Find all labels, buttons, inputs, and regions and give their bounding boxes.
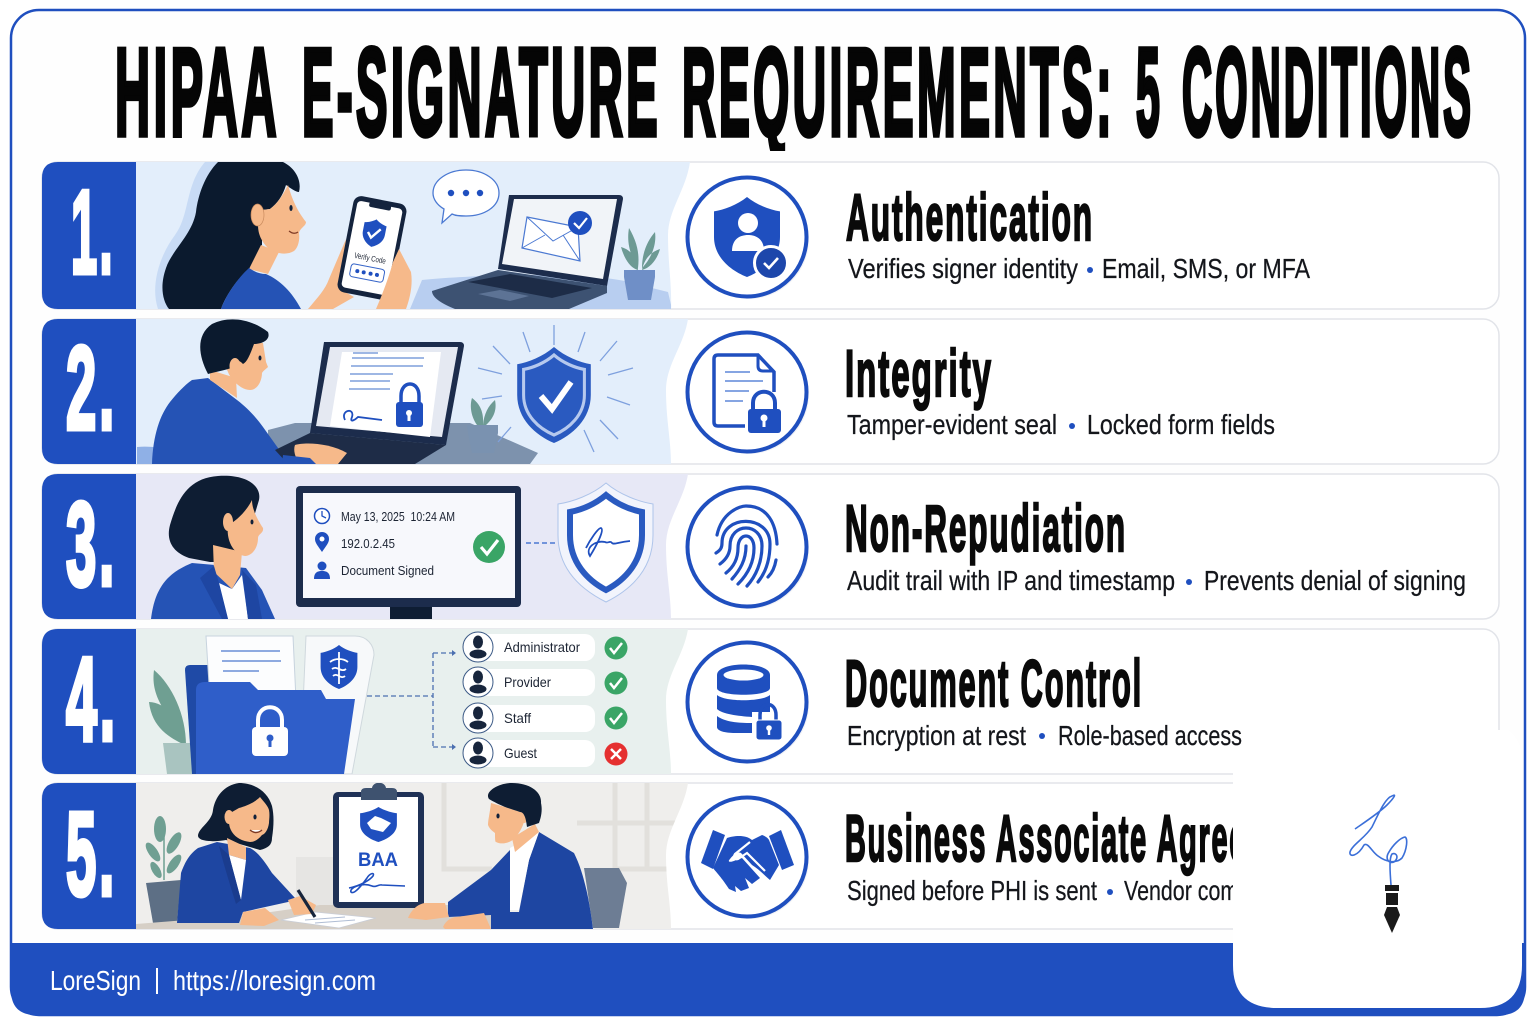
- illustration: locked folder with role access list: Provider: [504, 674, 551, 690]
- number 2: 2.: [66, 322, 117, 455]
- text: document control details: [847, 720, 1242, 751]
- footer bar: LoreSign: [50, 965, 141, 996]
- number 2: [42, 319, 136, 464]
- illustration: signing the BAA at a desk: [136, 783, 696, 929]
- number 1: 1.: [71, 166, 115, 299]
- text: business associate agreement details: Signed before PHI is sent: [847, 875, 1097, 906]
- panel: condition 4 document control: [42, 629, 1499, 774]
- number 1: [42, 162, 136, 309]
- illustration: locked folder with role access list: Staff: [504, 710, 531, 726]
- panel: condition 2 integrity: Integrity: [845, 336, 993, 410]
- panel: condition 1 authentication: Authentication: [846, 180, 1094, 254]
- panel: condition 3 non-repudiation: [42, 474, 1499, 621]
- panel: condition 3 non-repudiation: Non-Repudiation: [845, 491, 1127, 565]
- number 5: 5.: [66, 788, 117, 921]
- illustration: woman with audit log monitor and signed shield: May 13, 2025 10:24 AM: [341, 509, 455, 524]
- illustration: woman with audit log monitor and signed shield: [136, 474, 696, 621]
- icon: document with lock: [688, 332, 809, 454]
- title: 5: [1136, 24, 1163, 162]
- text: integrity details: [847, 409, 1275, 440]
- illustration: locked folder with role access list: [136, 629, 696, 774]
- icon: fingerprint: [688, 488, 809, 609]
- panel: condition 2 integrity: [42, 319, 1499, 464]
- panel: condition 4 document control: Document Control: [845, 646, 1143, 720]
- title: [117, 45, 1470, 151]
- footer bar: [11, 943, 1525, 1015]
- footer bar: https://loresign.com: [173, 965, 376, 996]
- illustration: signing the BAA at a desk: BAA: [358, 850, 398, 871]
- icon: handshake: [688, 798, 809, 919]
- illustration: woman with audit log monitor and signed shield: 192.0.2.45: [341, 536, 395, 551]
- text: non-repudiation details: Audit trail with IP and timestamp: [847, 565, 1175, 596]
- icon: fountain pen nib: [1384, 885, 1400, 933]
- icon: database with lock: [688, 642, 809, 764]
- text: integrity details: Tamper-evident seal: [847, 409, 1057, 440]
- text: authentication details: Email, SMS, or MFA: [1102, 253, 1310, 284]
- text: business associate agreement details: [847, 875, 1306, 906]
- text: document control details: Role-based access: [1058, 720, 1242, 751]
- icon: handwritten signature: [1350, 795, 1407, 885]
- illustration: man at laptop with lock and shield: [136, 319, 696, 464]
- illustration: woman with audit log monitor and signed shield: Document Signed: [341, 563, 434, 578]
- signature card with fountain pen: [1233, 730, 1522, 1008]
- illustration: woman verifying code on phone with laptop: Verify Code: [353, 251, 387, 266]
- icon: shield with user and check: [688, 178, 809, 299]
- title: HIPAA: [115, 24, 280, 162]
- number 4: 4.: [66, 633, 118, 766]
- number 4: [42, 629, 136, 774]
- text: document control details: Encryption at rest: [847, 720, 1026, 751]
- illustration: locked folder with role access list: Guest: [504, 745, 537, 761]
- text: business associate agreement details: Vendor compliance: [1124, 875, 1306, 906]
- text: authentication details: [848, 253, 1310, 284]
- number 3: 3.: [66, 478, 117, 611]
- number 3: [42, 474, 136, 619]
- text: non-repudiation details: [847, 565, 1466, 596]
- number 5: [42, 783, 136, 929]
- text: non-repudiation details: Prevents denial of signing: [1204, 565, 1466, 596]
- panel: condition 5 business associate agreement: [41, 782, 1233, 930]
- text: integrity details: Locked form fields: [1087, 409, 1275, 440]
- text: authentication details: Verifies signer identity: [848, 253, 1078, 284]
- title: E-SIGNATURE: [302, 24, 661, 162]
- illustration: locked folder with role access list: Administrator: [504, 639, 580, 655]
- panel: condition 1 authentication: [42, 162, 1499, 309]
- illustration: woman verifying code on phone with laptop: [136, 162, 696, 309]
